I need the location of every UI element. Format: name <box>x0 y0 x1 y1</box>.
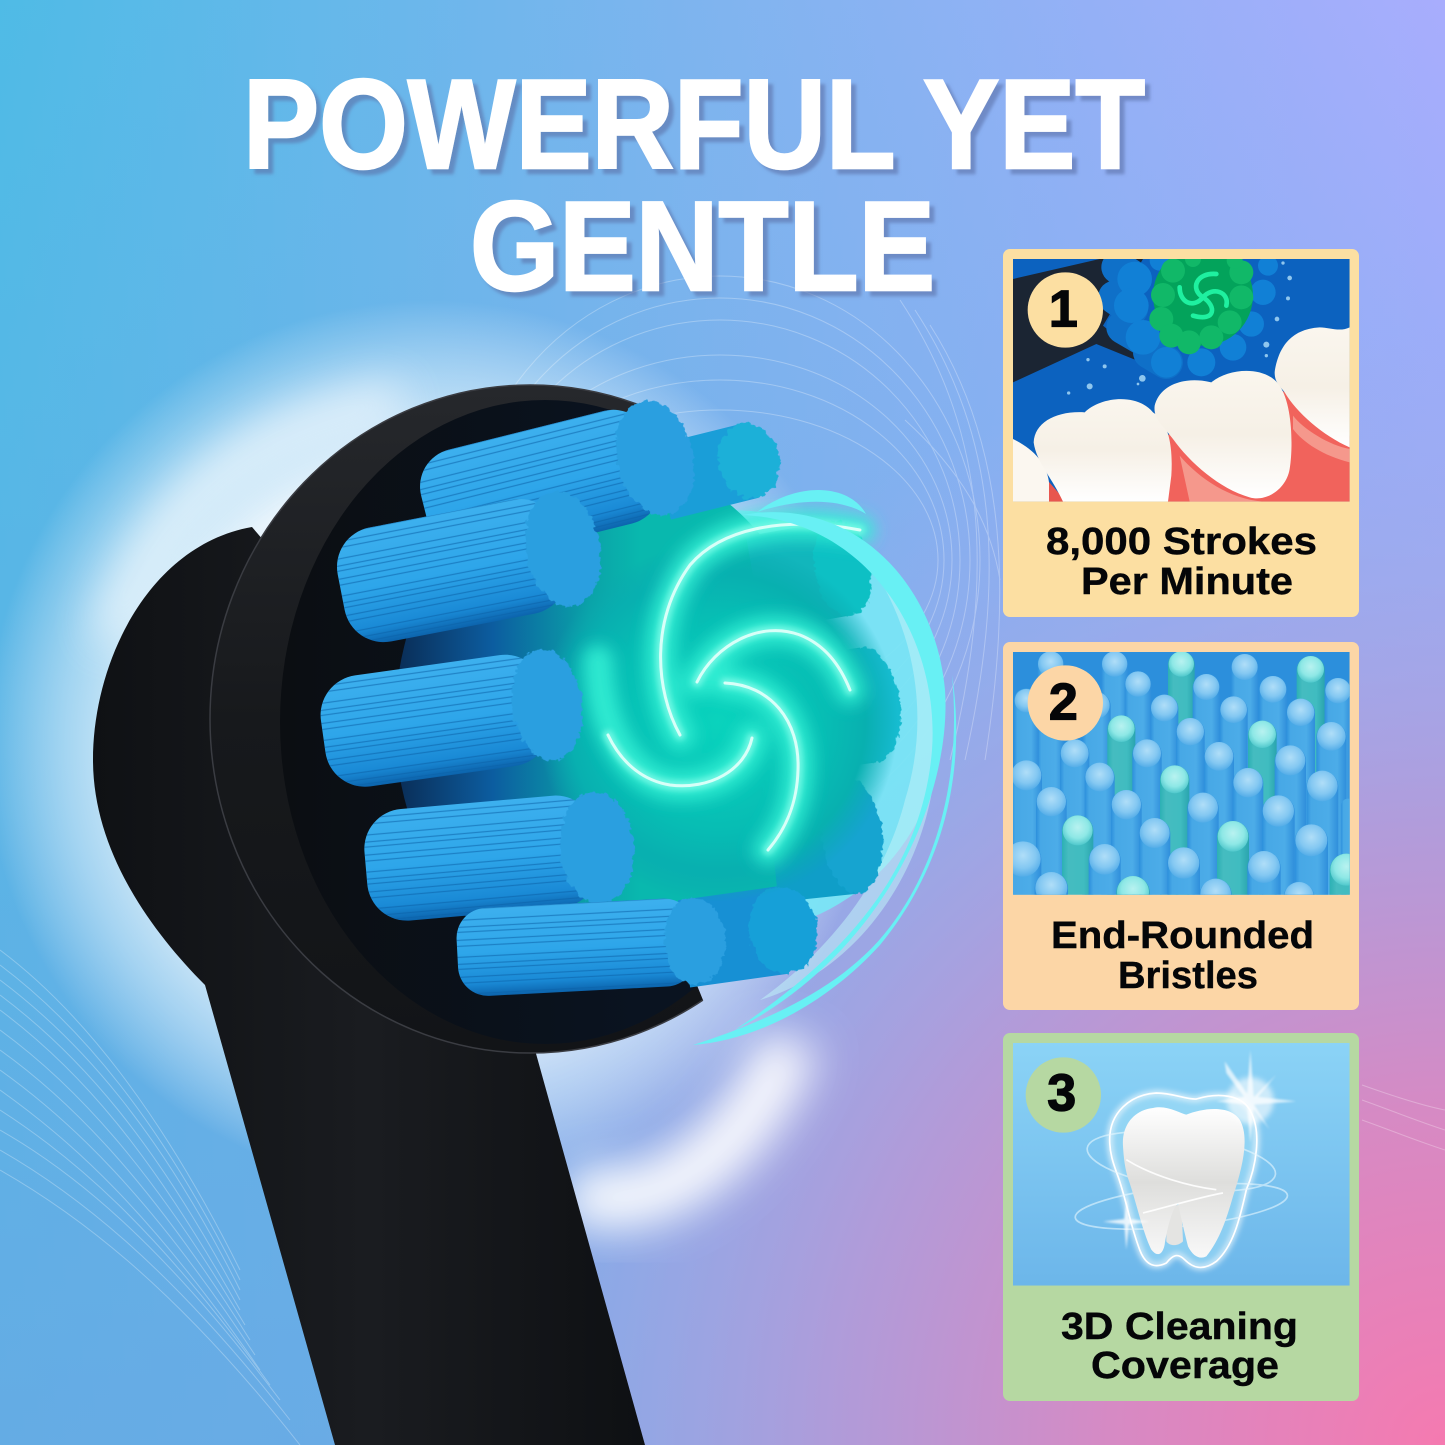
teal swirl vortex <box>538 524 898 902</box>
dark blue shadow below bristles <box>395 460 825 984</box>
panel 2: bristles <box>1003 642 1359 1010</box>
white energy glow behind brush <box>0 300 875 1199</box>
badge 3: 3 <box>1047 1064 1076 1122</box>
panel 3: 3D cleaning <box>1003 1033 1359 1401</box>
brush head rim <box>209 384 704 1054</box>
tuft upper <box>330 485 610 649</box>
badge 1: 1 <box>1049 280 1078 338</box>
badge 1 <box>1028 272 1103 348</box>
toothbrush illustration <box>93 385 956 1445</box>
caption 3: Coverage <box>1091 1345 1279 1387</box>
badge 3 <box>1026 1057 1101 1133</box>
title: POWERFUL YET <box>243 53 1145 195</box>
outer cyan motion arcs <box>693 490 956 1045</box>
tuft bottom <box>455 895 727 997</box>
badge 2: 2 <box>1049 673 1078 731</box>
image: bristle field <box>1013 652 1350 895</box>
brush handle and rear dome <box>93 527 645 1445</box>
caption 2 <box>1051 915 1314 997</box>
rear bristle tufts <box>652 417 908 987</box>
caption 2: End-Rounded <box>1051 915 1314 957</box>
cyan light disc <box>518 510 942 1000</box>
image: shining tooth <box>1013 1043 1350 1286</box>
caption 1: 8,000 Strokes <box>1046 521 1317 563</box>
title: GENTLE <box>470 175 935 317</box>
image: brush on teeth <box>1013 246 1350 502</box>
caption 1 <box>1046 521 1317 603</box>
title <box>243 53 1145 317</box>
badge 2 <box>1028 665 1103 741</box>
caption 3 <box>1061 1306 1298 1387</box>
caption 1: Per Minute <box>1081 561 1293 603</box>
tuft top <box>412 393 706 571</box>
tuft middle <box>315 645 589 792</box>
caption 3: 3D Cleaning <box>1061 1306 1298 1348</box>
tuft lower <box>361 789 639 924</box>
caption 2: Bristles <box>1118 955 1258 997</box>
front bristle tufts <box>315 393 727 997</box>
panel 1: strokes <box>1003 246 1359 617</box>
